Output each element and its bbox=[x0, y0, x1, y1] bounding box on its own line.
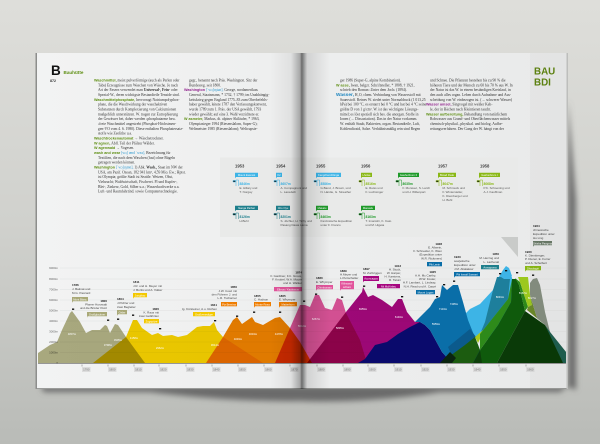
callouts: ascents: E. Whymper bbox=[316, 280, 333, 284]
callouts: ascents: M.G. Paccard bbox=[72, 291, 91, 295]
callouts: ascents: W. Harper, bbox=[387, 271, 401, 275]
text block: column 1: Blei-, Zinkerz, Gold, Silber u.a.; Wasserkraftwerke u.a. bbox=[98, 185, 180, 190]
callouts: peak name tags: Chimborazo bbox=[317, 285, 332, 289]
callouts: ascents: Expedition unter bbox=[454, 263, 476, 267]
credits: T. Norgay bbox=[240, 190, 253, 194]
credits: französische Expedition bbox=[320, 219, 353, 223]
callouts: peak name tags: Pik Lenin bbox=[429, 262, 441, 266]
heading: BAU BDI: BAU bbox=[534, 66, 555, 78]
callouts: ascents: J.Pichler und bbox=[117, 301, 135, 305]
mountain: bright right green bbox=[515, 278, 528, 311]
callouts: ascents: 1964 bbox=[533, 224, 540, 228]
chart: x axis: 1850 bbox=[239, 368, 246, 372]
heights: 8035m bbox=[402, 182, 413, 186]
text block: column 1: Luft- und Raumfahrtind. sowie Computertechnologie. bbox=[98, 190, 178, 194]
credits: L. Lacedelli bbox=[280, 190, 296, 194]
text block: column 1: Substanzen durch Komplexierung von Calciumionen bbox=[98, 108, 176, 112]
text block: column 3: Ionen (→ Dissoziation). Das in der Natur vorkomm. bbox=[340, 117, 417, 121]
callouts: ascents: W.R. Rickmers) bbox=[421, 256, 442, 260]
callouts: ascents: 1928 bbox=[435, 242, 442, 246]
heights bbox=[240, 182, 494, 219]
years row: 1954 bbox=[276, 164, 286, 168]
chart: peak heights: 8027m bbox=[528, 296, 537, 300]
y axis labels: 4000m bbox=[49, 319, 59, 323]
callouts: ascents: Hu Ling bbox=[533, 236, 544, 240]
callouts: ascents: 1897 bbox=[363, 267, 370, 271]
callouts: ascents bbox=[72, 224, 555, 318]
text block: column 4: Wasser amsel, Singvogel mit weißer Keh- bbox=[426, 103, 493, 107]
callouts: peak name tags bbox=[72, 241, 552, 323]
text block: column 4: chemisch-physikal., physikal. und biolog. Aufbe- bbox=[430, 122, 503, 127]
chart: peak heights: 6267m bbox=[312, 317, 321, 321]
chart: peak heights: 5642m bbox=[298, 324, 307, 328]
text block: column 1: Waschtrockenautomat → Wäschetrockner. bbox=[94, 136, 164, 140]
heights: 8586m bbox=[320, 182, 331, 186]
mountain: low dark green bbox=[450, 337, 480, 363]
callouts: ascents: sowjetische bbox=[454, 259, 470, 263]
credits: H. Buhl bbox=[442, 198, 453, 202]
callouts: ascents: N.H. Read und A. Carpé bbox=[404, 284, 436, 288]
heights: 8163m bbox=[366, 215, 376, 219]
text block: column 4: scheidung von W. einbezogen ist. (→ schwerer Wasser) bbox=[430, 98, 513, 102]
y axis labels: 9000m bbox=[49, 266, 59, 270]
chart: peak heights: 4049m bbox=[234, 337, 243, 341]
callouts: ascents: J.R. und H. Meyer mit bbox=[133, 284, 162, 288]
callouts: ascents: 1933 bbox=[454, 255, 461, 259]
chart: peak heights: 4634m bbox=[249, 332, 258, 336]
chart: x axis: 1820 bbox=[160, 368, 167, 372]
mountain: dark base bbox=[497, 311, 563, 363]
chart: peak heights bbox=[68, 291, 537, 350]
text block: column 4: den auch alles organ. Leben durch Aufnahme und Aus- bbox=[430, 93, 512, 97]
callouts: ascents: H.F. Lambart, L. Lindsay, bbox=[403, 280, 436, 284]
callouts: peak name tags: Matterhorn bbox=[282, 302, 295, 306]
chart: peak heights: 4158m bbox=[130, 336, 139, 340]
text block: column 2: keitskrieg gegen England 1775–83 zum Oberbefehls- bbox=[189, 98, 269, 102]
chart: x axis: 1920 bbox=[422, 368, 429, 372]
text block: column 1: Art der Fasern verwendet man Universal-, Fein- oder bbox=[98, 88, 178, 92]
mountain: olive band bbox=[527, 295, 545, 325]
chart: x axis: 1950 bbox=[500, 368, 507, 372]
heights: 8846m bbox=[240, 182, 250, 186]
chart: x axis: 1840 bbox=[213, 368, 220, 372]
credits: M. Schmuck und bbox=[442, 186, 465, 190]
tags row 2 bbox=[235, 206, 375, 211]
chart: x axis: 1930 bbox=[448, 368, 455, 372]
text block: column 4 bbox=[426, 78, 513, 131]
text block: column 2: Bundesreg. seit 1800. bbox=[189, 83, 221, 87]
text block: column 2: Washington [ˈwɔʃɪŋtən], George, nordamerikan. bbox=[184, 88, 258, 93]
text block: column 2: wurde 1789 zum 1. Präs. der USA gewählt, 1793 bbox=[189, 108, 261, 112]
mountain: navy bbox=[358, 322, 452, 363]
text block: column 3: schrieb den Roman ›Unter dem Joch‹ (1894). bbox=[340, 88, 407, 92]
mountain: yellow bbox=[93, 320, 263, 363]
years row bbox=[235, 164, 490, 168]
page shadow bbox=[40, 100, 576, 402]
tags row 1 bbox=[235, 173, 500, 178]
years row: 1956 bbox=[361, 164, 371, 168]
chart: peak heights: 2962m bbox=[156, 346, 165, 350]
callouts: ascents: und A. Schelbert bbox=[525, 261, 547, 265]
credits: A.J. Kauffman bbox=[484, 190, 503, 194]
mountain: purple bbox=[307, 287, 443, 363]
heights: 8047m bbox=[442, 182, 453, 186]
callouts: ascents: W.W. Foster, bbox=[419, 277, 436, 281]
credits: F. Wintersteller, bbox=[442, 190, 463, 194]
mountain: mid green bbox=[480, 279, 512, 350]
callouts: ascents: zwei Begleiter bbox=[117, 305, 136, 309]
callouts: peak name tags: Zugspitze bbox=[146, 319, 158, 323]
text block: column 4: Rohwasser aus Grund- und Oberflächenwasser mittels bbox=[430, 117, 511, 121]
callouts: ascents: L.Purtscheller bbox=[340, 276, 358, 280]
chart: peak heights: 5959m bbox=[432, 322, 441, 326]
tags row 1: Mount Everest bbox=[238, 173, 255, 177]
page number: 872 bbox=[50, 79, 56, 83]
callouts: peak name tags: Dhaulagiri bbox=[527, 266, 539, 270]
chart: peak heights: 4807m bbox=[68, 332, 77, 336]
chart: peak heights: 3798m bbox=[104, 343, 113, 347]
tags row 1: Kangchendzönga bbox=[318, 173, 339, 177]
chart: peak heights: 7134m bbox=[439, 307, 448, 311]
chart: x axis: 1810 bbox=[135, 368, 142, 372]
tags row 2: Manaslu bbox=[363, 206, 374, 210]
magazine pages bbox=[36, 53, 568, 389]
text block: column 1: ›freie Waschmittel angestrebt (Phosphat-Höchstmen- bbox=[98, 122, 177, 126]
text block: column 2: haber gewählt, leitete 1787 den Verfassungskonvent, bbox=[189, 103, 267, 108]
credits: und H. Willenpart bbox=[402, 190, 426, 194]
text block: column 3 bbox=[336, 78, 427, 132]
tags row 1: Lhotse bbox=[362, 173, 371, 177]
callouts: ascents: und H. Walker bbox=[283, 281, 302, 285]
callouts: peak name tags: Großglockner bbox=[89, 312, 105, 316]
mountain: near-black base bbox=[440, 352, 456, 363]
callouts: ascents: 1865 bbox=[279, 294, 286, 298]
years row: 1953 bbox=[235, 164, 245, 168]
text block: column 2: Olympiasieger 1994 (Riesenslalom, Super-G); bbox=[189, 122, 258, 127]
callouts: ascents: 1950 bbox=[492, 252, 499, 256]
callouts: ascents: A.H. Mc Carthy, bbox=[415, 274, 436, 278]
heights: 8126m bbox=[240, 215, 250, 219]
chart: peak heights: 8167m bbox=[519, 291, 528, 295]
mountain: orange bbox=[206, 317, 312, 363]
callouts: peak name tags: Annapurna bbox=[483, 265, 497, 269]
text block: column 4: le, der in Bächen nach Kleintieren taucht. bbox=[430, 108, 491, 112]
callouts: ascents: und die Brüder Klotz bbox=[80, 306, 107, 310]
chart: x axis bbox=[38, 364, 566, 372]
callouts: peak name tags: Piz Bernina bbox=[222, 302, 236, 306]
tags row 2: Makalu bbox=[318, 206, 327, 210]
mountain: grey bbox=[530, 278, 566, 356]
mountain: top-cluster accents bbox=[503, 266, 512, 276]
callouts: ascents: 1960 bbox=[525, 250, 532, 254]
chart: x axis: 1910 bbox=[395, 368, 402, 372]
text block: column 1: getragen werden können. bbox=[98, 161, 135, 165]
tags row 1: Gasherbrum I bbox=[481, 173, 498, 177]
callouts: ascents: P. Diener, E. Forrer bbox=[525, 257, 550, 261]
chart: x axis: 1940 bbox=[474, 368, 481, 372]
chart: peak heights: 6959m bbox=[359, 307, 368, 311]
callouts: peak name tags: scharo bbox=[343, 285, 352, 289]
mountain: light blue bbox=[465, 270, 515, 340]
callouts: ascents: den Führern J. und bbox=[212, 292, 237, 296]
mountain: teal edge bbox=[545, 325, 566, 363]
credits: F. Moravec, S. Larch bbox=[402, 186, 430, 190]
chart: x axis: 1830 bbox=[187, 368, 194, 372]
credits: A. Compagnoni und bbox=[280, 186, 307, 190]
callouts: ascents: Ig. Kürsteiner, A.u. Rothen bbox=[182, 307, 217, 311]
credits: H.Buhl bbox=[240, 219, 249, 223]
heights: 8516m bbox=[366, 182, 376, 186]
callouts: ascents: Pfarrer Horowalt bbox=[85, 302, 107, 306]
text block: column 2: Weltmeister 1985 (Riesenslalom); Weltcupsie- bbox=[189, 127, 258, 131]
credits: Pasang Dawa Lama bbox=[280, 223, 308, 227]
callouts: ascents: H. Karstens, bbox=[384, 274, 401, 278]
text block: column 3: größte D von 1 g/cm³. W. ist das wichtigste Lösungs- bbox=[340, 108, 419, 112]
chart: x axis: 1960 bbox=[527, 368, 534, 372]
callouts: peak name tags: Mt McKinley bbox=[381, 284, 396, 288]
mountain: central green bbox=[480, 279, 525, 363]
callouts: ascents: E. Allwein, bbox=[428, 246, 442, 250]
tags row 1: Broad Peak bbox=[440, 173, 455, 177]
callouts: ascents: 1855 bbox=[254, 294, 261, 298]
chart: peak heights: 3614m bbox=[211, 343, 220, 347]
text block: column 1: Textilien, die nach dem Waschen (fast) ohne Bügeln bbox=[98, 156, 175, 161]
heights: 8201m bbox=[280, 215, 291, 219]
y axis labels: 2000m bbox=[49, 340, 59, 344]
tags row 1: K2 bbox=[277, 173, 281, 177]
tags row 1: Gasherbrum II bbox=[400, 173, 417, 177]
heights: 8607m bbox=[280, 182, 291, 186]
callouts: peak name tags: Aconcagua bbox=[364, 277, 378, 281]
years row: 1955 bbox=[316, 164, 326, 168]
text block: column 4: Wasser aufbereitung, Behandlung von natürlichem bbox=[426, 112, 507, 116]
credits: K. Diemberger und bbox=[442, 194, 468, 198]
flag icons bbox=[233, 180, 482, 219]
chart: grid and y axis bbox=[49, 266, 566, 365]
callouts: ascents: R. Tatum bbox=[389, 278, 401, 282]
callouts: ascents: 1925 bbox=[429, 270, 436, 274]
tags row 2: Nanga Parbat bbox=[238, 206, 255, 210]
callouts: ascents: F. Knubel, W.A. Moore bbox=[272, 278, 302, 282]
callouts: ascents: zwei Gefährten bbox=[139, 314, 159, 318]
credits: und M. Higeta bbox=[366, 223, 385, 227]
chart: x axis: 1900 bbox=[369, 368, 376, 372]
callouts: ascents: 1874 bbox=[295, 270, 302, 274]
text block: column 1: W agnen, Abfl. Teil der Pfälzer Wälder. bbox=[94, 141, 155, 145]
heights: 8463m bbox=[320, 215, 331, 219]
text block: column 1: Waschmittelphosphate, hervorragt Natriumpolyphos- bbox=[94, 98, 180, 102]
credits: F. Luchsinger bbox=[366, 190, 383, 194]
callouts: ascents: 1913 bbox=[394, 264, 401, 268]
text block: column 2: gegr., benannt nach Präs. Washington. Sitz der bbox=[189, 78, 258, 84]
callouts: ascents: 1786 bbox=[72, 283, 79, 287]
chart: peak flags bbox=[72, 270, 534, 329]
text block: column 1: wash and wear [wɔʃ ænd ˈweə], Bezeichnung für bbox=[93, 151, 171, 156]
text block: column 4: der Natur ist das W. in einem beständigen Kreislauf, in bbox=[430, 88, 511, 93]
y axis labels: 6000m bbox=[49, 298, 59, 302]
callouts: ascents: L. Lachenal bbox=[483, 260, 499, 264]
callouts: ascents: 1800 bbox=[100, 299, 107, 303]
text block: column 1: USA, am Pazif. Ozean, 182 941 km², 4,59 Mio. Ew.; Hptst. bbox=[98, 170, 186, 175]
tags row 2: Cho Oyu bbox=[278, 206, 289, 210]
callouts: ascents: F. Schneider, K. Wien bbox=[413, 249, 442, 253]
callouts: ascents: K. Diemberger, bbox=[525, 254, 545, 258]
text block: column 2 bbox=[184, 78, 270, 131]
callouts: ascents: C. Hudson bbox=[254, 298, 269, 302]
chart: x axis: 1890 bbox=[344, 368, 351, 372]
callouts: ascents: 1889 bbox=[340, 269, 347, 273]
callouts: ascents: 1820 bbox=[152, 307, 159, 311]
text block: column 1: maßgeblich unterstützen. W. tragen zur Eutrophierung bbox=[98, 112, 178, 116]
text block: column 3: W asse, Iwan, belgzr. Schriftsteller, * 1808, † 1921, bbox=[336, 83, 415, 88]
text block: column 2: General, Staatsmann, * 1732, † 1799; im Unabhängig- bbox=[189, 93, 270, 98]
y axis labels: 5000m bbox=[49, 308, 59, 312]
text block: column 3: ger 1986 (Super-G, alpine Kombination). bbox=[340, 78, 401, 84]
text block: column 3: hPa) bei 100 °C, es erstarrt bei 0 °C und hat bei 4 °C seine bbox=[340, 103, 427, 108]
mountain: Alps olive bbox=[38, 311, 145, 363]
text block: column 3: Wasser, H₂O, chem. Verbindung von Wasserstoff mit bbox=[336, 92, 421, 98]
callouts: peak name tags: Ortler bbox=[119, 310, 125, 314]
callouts: peak name tags: Monte Rosa bbox=[255, 302, 270, 306]
y axis labels: 3000m bbox=[49, 330, 59, 334]
callouts: peak name tags: Jungfrau bbox=[135, 293, 146, 297]
credits: P.K. Schoening und bbox=[484, 186, 510, 190]
y axis labels: 7000m bbox=[49, 288, 59, 292]
text block: column 3: mittel; es löst speziell sich bes. die anorgan. Stoffe in bbox=[340, 112, 419, 116]
text block: column 1 bbox=[93, 78, 186, 194]
y axis labels bbox=[49, 266, 59, 365]
text block: column 1: Washington [ˈwɔʃɪŋtən], 1) Abk. Wash., Staat im NW der bbox=[94, 166, 183, 170]
years row: 1958 bbox=[480, 164, 490, 168]
chart: peak heights: 4478m bbox=[275, 332, 284, 336]
callouts: peak name tags: Mont Blanc bbox=[73, 297, 87, 301]
callouts: peak name tags: Kilimand- bbox=[341, 282, 353, 286]
callouts: peak name tags: Großvenediger bbox=[195, 312, 213, 316]
callouts: ascents: (Expedition unter bbox=[419, 252, 442, 256]
credits bbox=[240, 186, 510, 227]
text block: column 1: phate, die die Waschwirkung der waschaktiven bbox=[98, 103, 167, 108]
callouts: ascents: 1841 bbox=[210, 303, 217, 307]
heading: section letter: B bbox=[51, 63, 61, 78]
text block: column 4: reitungsverfahren. Der Gang der W. hängt von der bbox=[430, 127, 505, 131]
credits: T. Imanishi, K. Kato bbox=[366, 219, 392, 223]
text block: column 3: W. enthält Staub, Bakterien, organ. Bestandteile, Luft, bbox=[340, 122, 420, 127]
callouts: ascents: 1804 bbox=[117, 297, 124, 301]
chart: peak heights: 7495m bbox=[450, 302, 459, 306]
chart: x axis: 1860 bbox=[265, 368, 272, 372]
mountain: lime bbox=[518, 277, 532, 307]
callouts: ascents: M. Herzog und bbox=[479, 256, 499, 260]
mountain: blue overlap bbox=[448, 329, 476, 358]
chart: x axis: 1790 bbox=[83, 368, 90, 372]
chart: peak heights: 6194m bbox=[395, 315, 404, 319]
y axis labels: 8000m bbox=[49, 277, 59, 281]
text block: column 3: Sauerstoff. Reines W. siedet unter Normaldruck (1 013,25 bbox=[340, 98, 426, 103]
mountain: blue bbox=[415, 285, 485, 363]
mountain: lime tip bbox=[475, 330, 483, 343]
chart: x axis: 1880 bbox=[318, 368, 325, 372]
panel: timeline 1953–1958 bbox=[220, 158, 518, 237]
text block: column 1: der Gewässer bei, daher werden ›phosphatarme bzw. bbox=[98, 117, 176, 122]
chart: peak heights: 5895m bbox=[336, 326, 345, 330]
text block: column 1: ist Olympia; größte Stadt ist Seattle. Weizen, Obst, bbox=[98, 175, 173, 180]
mountain: foot dark bbox=[473, 350, 484, 363]
callouts: ascents: 1850 bbox=[230, 285, 237, 289]
mountain: teal bbox=[480, 277, 510, 334]
callouts: ascents: J. Bortis und A. Volker bbox=[133, 288, 162, 292]
chart: x axis: 1870 bbox=[291, 368, 298, 372]
callouts: ascents: 1811 bbox=[133, 280, 140, 284]
callouts: ascents: J. Balmat und bbox=[72, 287, 91, 291]
decorative fold triangle bbox=[501, 237, 518, 257]
callouts: ascents: E. Whymper bbox=[279, 298, 296, 302]
chart: mountain silhouettes bbox=[38, 266, 566, 363]
credits: unter F. Franco bbox=[320, 223, 341, 227]
callouts: peak name tags: Mount Logan bbox=[418, 290, 434, 294]
heights: 8068m bbox=[484, 182, 494, 186]
text block: column 3: Kohlendioxid, Salze. Verhältnismäßig rein sind Regen bbox=[340, 127, 420, 132]
chart: peak heights: 8091m bbox=[496, 295, 505, 299]
heading: Bauhütte: Bauhütte bbox=[64, 70, 84, 75]
callouts: ascents: L.R. Tscharner bbox=[218, 296, 237, 300]
callouts: ascents: Expedition unter bbox=[533, 232, 555, 236]
credits: E. Reiss und bbox=[366, 186, 383, 190]
callouts: ascents: J.M. Abalakow bbox=[454, 267, 474, 271]
mountain: pink bbox=[275, 295, 367, 363]
chart: x axis: 1800 bbox=[109, 368, 116, 372]
callouts: ascents: J.W. Coaz mit bbox=[218, 289, 237, 293]
callouts: ascents: H. Stuck, bbox=[389, 268, 401, 272]
text block: column 1: stoffe wie Zeolithe u.a. bbox=[98, 132, 132, 136]
text block: column 1: Viehzucht; Waldwirtschaft, Fischerei. Fl und Kupfer-, bbox=[98, 180, 177, 185]
credits: S. Jöchler, H. Tichy und bbox=[280, 219, 312, 223]
years row: 1957 bbox=[438, 164, 448, 168]
callouts: ascents: 1880 bbox=[316, 276, 323, 280]
y axis labels: 0 bbox=[56, 361, 58, 365]
text block: column 2: W asmeier, Markus, dt. alpiner Skiläufer, * 1963, bbox=[184, 117, 260, 122]
heading: BAU BDI: BDI bbox=[534, 78, 551, 88]
text block: column 1: W agenwald → Vogesen. bbox=[94, 146, 134, 150]
text block: column 1: Spezial-W., deren wichtigste Bestandteile Tenside sind. bbox=[98, 93, 180, 98]
text block: column 1: gen-VO vom 4. 6. 1980). Diese enthalten Phosphatersatz- bbox=[98, 127, 184, 131]
callouts: ascents: M. Zurbriggen bbox=[363, 271, 382, 275]
callouts: ascents: F. Gardiner, F.C. Grove, bbox=[270, 274, 302, 278]
credits: N. Hardie, G. Streather bbox=[320, 190, 351, 194]
text block: column 4: und Schnee. Die Pflanzen bestehen bis zu 90 % die bbox=[430, 78, 506, 82]
text block: column 1: Waschmittel, meist pulverförmige (auch als Perlen oder bbox=[94, 78, 180, 82]
credits: G.Band, J. Brown, und bbox=[320, 186, 351, 190]
y axis labels: 1000m bbox=[49, 350, 59, 354]
text block: column 1: Tabs) Erzeugnisse zum Waschen von Wäsche. Je nach bbox=[98, 83, 178, 87]
text block: column 2: wieder gewählt; auf eine 3. Wahl verzichtete er. bbox=[189, 112, 259, 116]
callouts: peak name tags: Pik Ismail Samani bbox=[456, 272, 478, 276]
callouts: peak name tags: Elbrus / Kaukasus bbox=[277, 287, 299, 291]
callouts: peak name tags: Shisha Pangma bbox=[533, 241, 552, 245]
spine shading bbox=[270, 53, 568, 389]
callouts: ascents: K. Raus mit bbox=[143, 310, 159, 314]
callouts: ascents: chinesische bbox=[533, 228, 549, 232]
chart: peak heights: 3905m bbox=[114, 338, 123, 342]
text block: column 4: höheren Tiere und der Mensch zu 60 bis 70 % aus W. In bbox=[430, 83, 513, 87]
credits: E. Hillary und bbox=[240, 186, 258, 190]
callouts: ascents: H.Meyer und bbox=[340, 272, 358, 276]
